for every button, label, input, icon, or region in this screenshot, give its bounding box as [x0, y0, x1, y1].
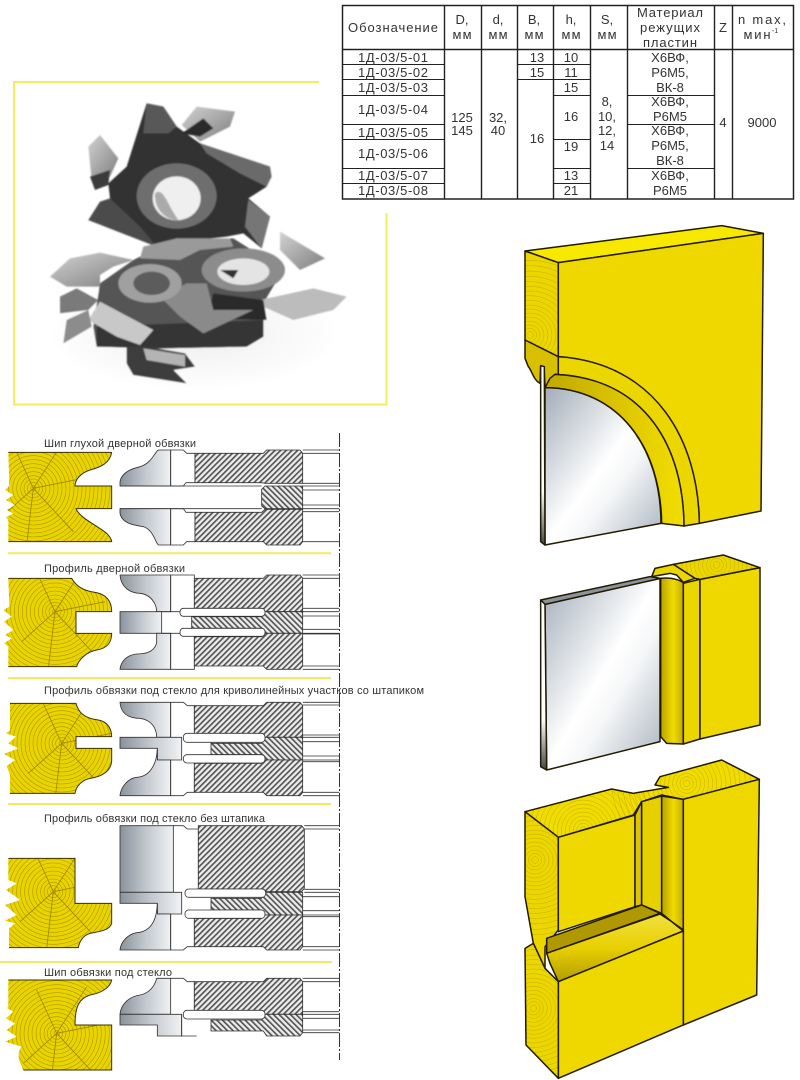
table values: Р6М5 — [653, 109, 687, 124]
column with moulding — [662, 796, 683, 930]
table designation column: 1Д-03/5-08 — [358, 183, 428, 198]
table values: 4 — [719, 115, 727, 130]
right face — [683, 779, 759, 1025]
table values: Х6ВФ, — [651, 168, 689, 183]
profile 5: glazing rail tenon — [5, 968, 340, 1070]
table header: Обозначение — [348, 20, 438, 35]
wood section and cutter — [5, 825, 340, 950]
table values: 125 — [451, 110, 473, 125]
glass — [545, 578, 660, 770]
table values: 32, — [489, 110, 507, 125]
moulding column — [683, 579, 700, 744]
profile 3: glazing rail for curved sections with bead — [4, 686, 424, 796]
table designation column: 1Д-03/5-07 — [358, 168, 428, 183]
table header: мм — [452, 27, 472, 42]
table values: 21 — [564, 183, 578, 198]
wood section and cutter — [5, 978, 340, 1070]
table header: режущих — [640, 20, 700, 35]
table designation column: 1Д-03/5-01 — [358, 50, 428, 65]
lower cutters — [50, 232, 347, 383]
wood section and cutter — [3, 574, 340, 670]
profile 4: glazing rail without bead — [5, 814, 340, 950]
table header — [348, 5, 786, 50]
table designation column: 1Д-03/5-03 — [358, 80, 428, 95]
glass side edge — [541, 600, 547, 770]
table values: 8, — [602, 94, 612, 109]
main face — [558, 233, 763, 523]
table values: 40 — [491, 123, 505, 138]
table values: 10 — [564, 50, 578, 65]
heading: Профиль обвязки под стекло без штапика — [44, 813, 266, 825]
3D view: frame with glazing bar — [524, 759, 760, 1080]
specifications table — [342, 5, 794, 199]
end grain — [525, 251, 558, 357]
table designation column: 1Д-03/5-06 — [358, 146, 428, 161]
table designation column: 1Д-03/5-05 — [358, 125, 428, 140]
table values: 145 — [451, 123, 473, 138]
table values: 16 — [530, 131, 544, 146]
sill moulding — [547, 914, 683, 982]
top grain — [525, 760, 759, 837]
lower end grain — [525, 943, 558, 1078]
arch moulding — [555, 357, 699, 526]
table values: 13 — [564, 168, 578, 183]
table header: мм — [488, 27, 508, 42]
table values: 9000 — [748, 115, 776, 130]
profile 1: blind door rail tenon — [5, 438, 340, 546]
table values: ВК-8 — [656, 80, 684, 95]
table values: Х6ВФ, — [651, 123, 689, 138]
upper cutter — [47, 103, 340, 390]
table values: 12, — [598, 123, 616, 138]
glass edge — [541, 366, 545, 545]
photo: set of cutters — [47, 103, 347, 390]
table header: D, — [456, 12, 468, 27]
table values: Р6М5, — [651, 65, 689, 80]
heading: Профиль обвязки под стекло для криволинейных участков со штапиком — [44, 685, 424, 697]
table header: n max, — [738, 12, 786, 27]
wood section and cutter — [5, 450, 340, 546]
table header: мм — [598, 27, 617, 42]
upper end grain — [525, 812, 558, 968]
table designation column: 1Д-03/5-04 — [358, 102, 428, 117]
table values: Х6ВФ, — [651, 94, 689, 109]
separator — [8, 677, 331, 679]
top face — [525, 226, 763, 263]
photo frame — [14, 82, 386, 404]
table values: 15 — [564, 80, 578, 95]
table values — [451, 50, 776, 198]
table values: Х6ВФ, — [651, 50, 689, 65]
heading: Шип глухой дверной обвязки — [44, 438, 196, 450]
heading: Шип обвязки под стекло — [44, 967, 172, 979]
table header: мин — [744, 27, 770, 42]
rebate column — [661, 578, 683, 744]
lower profile — [525, 340, 558, 387]
table header: Z — [719, 20, 727, 35]
table header: пластин — [643, 35, 697, 50]
table values: 10, — [598, 109, 616, 124]
table header: B, — [528, 12, 540, 27]
table designation column — [358, 50, 428, 198]
table header: d, — [493, 12, 503, 27]
centre line — [338, 433, 340, 1060]
separator — [8, 552, 331, 554]
table header: мм — [562, 27, 581, 42]
table designation column: 1Д-03/5-02 — [358, 65, 428, 80]
table values: ВК-8 — [656, 153, 684, 168]
heading: Профиль дверной обвязки — [44, 563, 185, 575]
table header: S, — [601, 12, 613, 27]
table header: Материал — [637, 5, 703, 20]
lower front face — [558, 931, 683, 1078]
rebate strip — [635, 802, 642, 907]
table header: -1 — [772, 28, 778, 35]
main face — [700, 568, 760, 739]
tongue — [652, 564, 695, 582]
table header: мм — [524, 27, 544, 42]
profile 2: door rail — [3, 564, 340, 670]
table values: 19 — [564, 139, 578, 154]
separator — [8, 803, 331, 805]
sill rebate — [547, 905, 660, 953]
arch rebate — [545, 374, 684, 526]
table values: 13 — [530, 50, 544, 65]
table values: 14 — [600, 138, 614, 153]
table values: 11 — [564, 65, 578, 80]
column — [642, 796, 662, 913]
upper front face — [558, 815, 635, 932]
glass top edge — [541, 577, 661, 604]
top grain — [673, 555, 760, 579]
table values: 15 — [530, 65, 544, 80]
separator — [0, 961, 332, 963]
table values: Р6М5 — [653, 183, 687, 198]
table values: Р6М5, — [651, 138, 689, 153]
3D view: straight glazed frame — [540, 554, 761, 771]
wood section and cutter — [4, 702, 340, 796]
3D view: arched glazed frame — [524, 224, 764, 546]
table values: 16 — [564, 109, 578, 124]
glass — [545, 388, 661, 545]
table header: h, — [566, 12, 576, 27]
